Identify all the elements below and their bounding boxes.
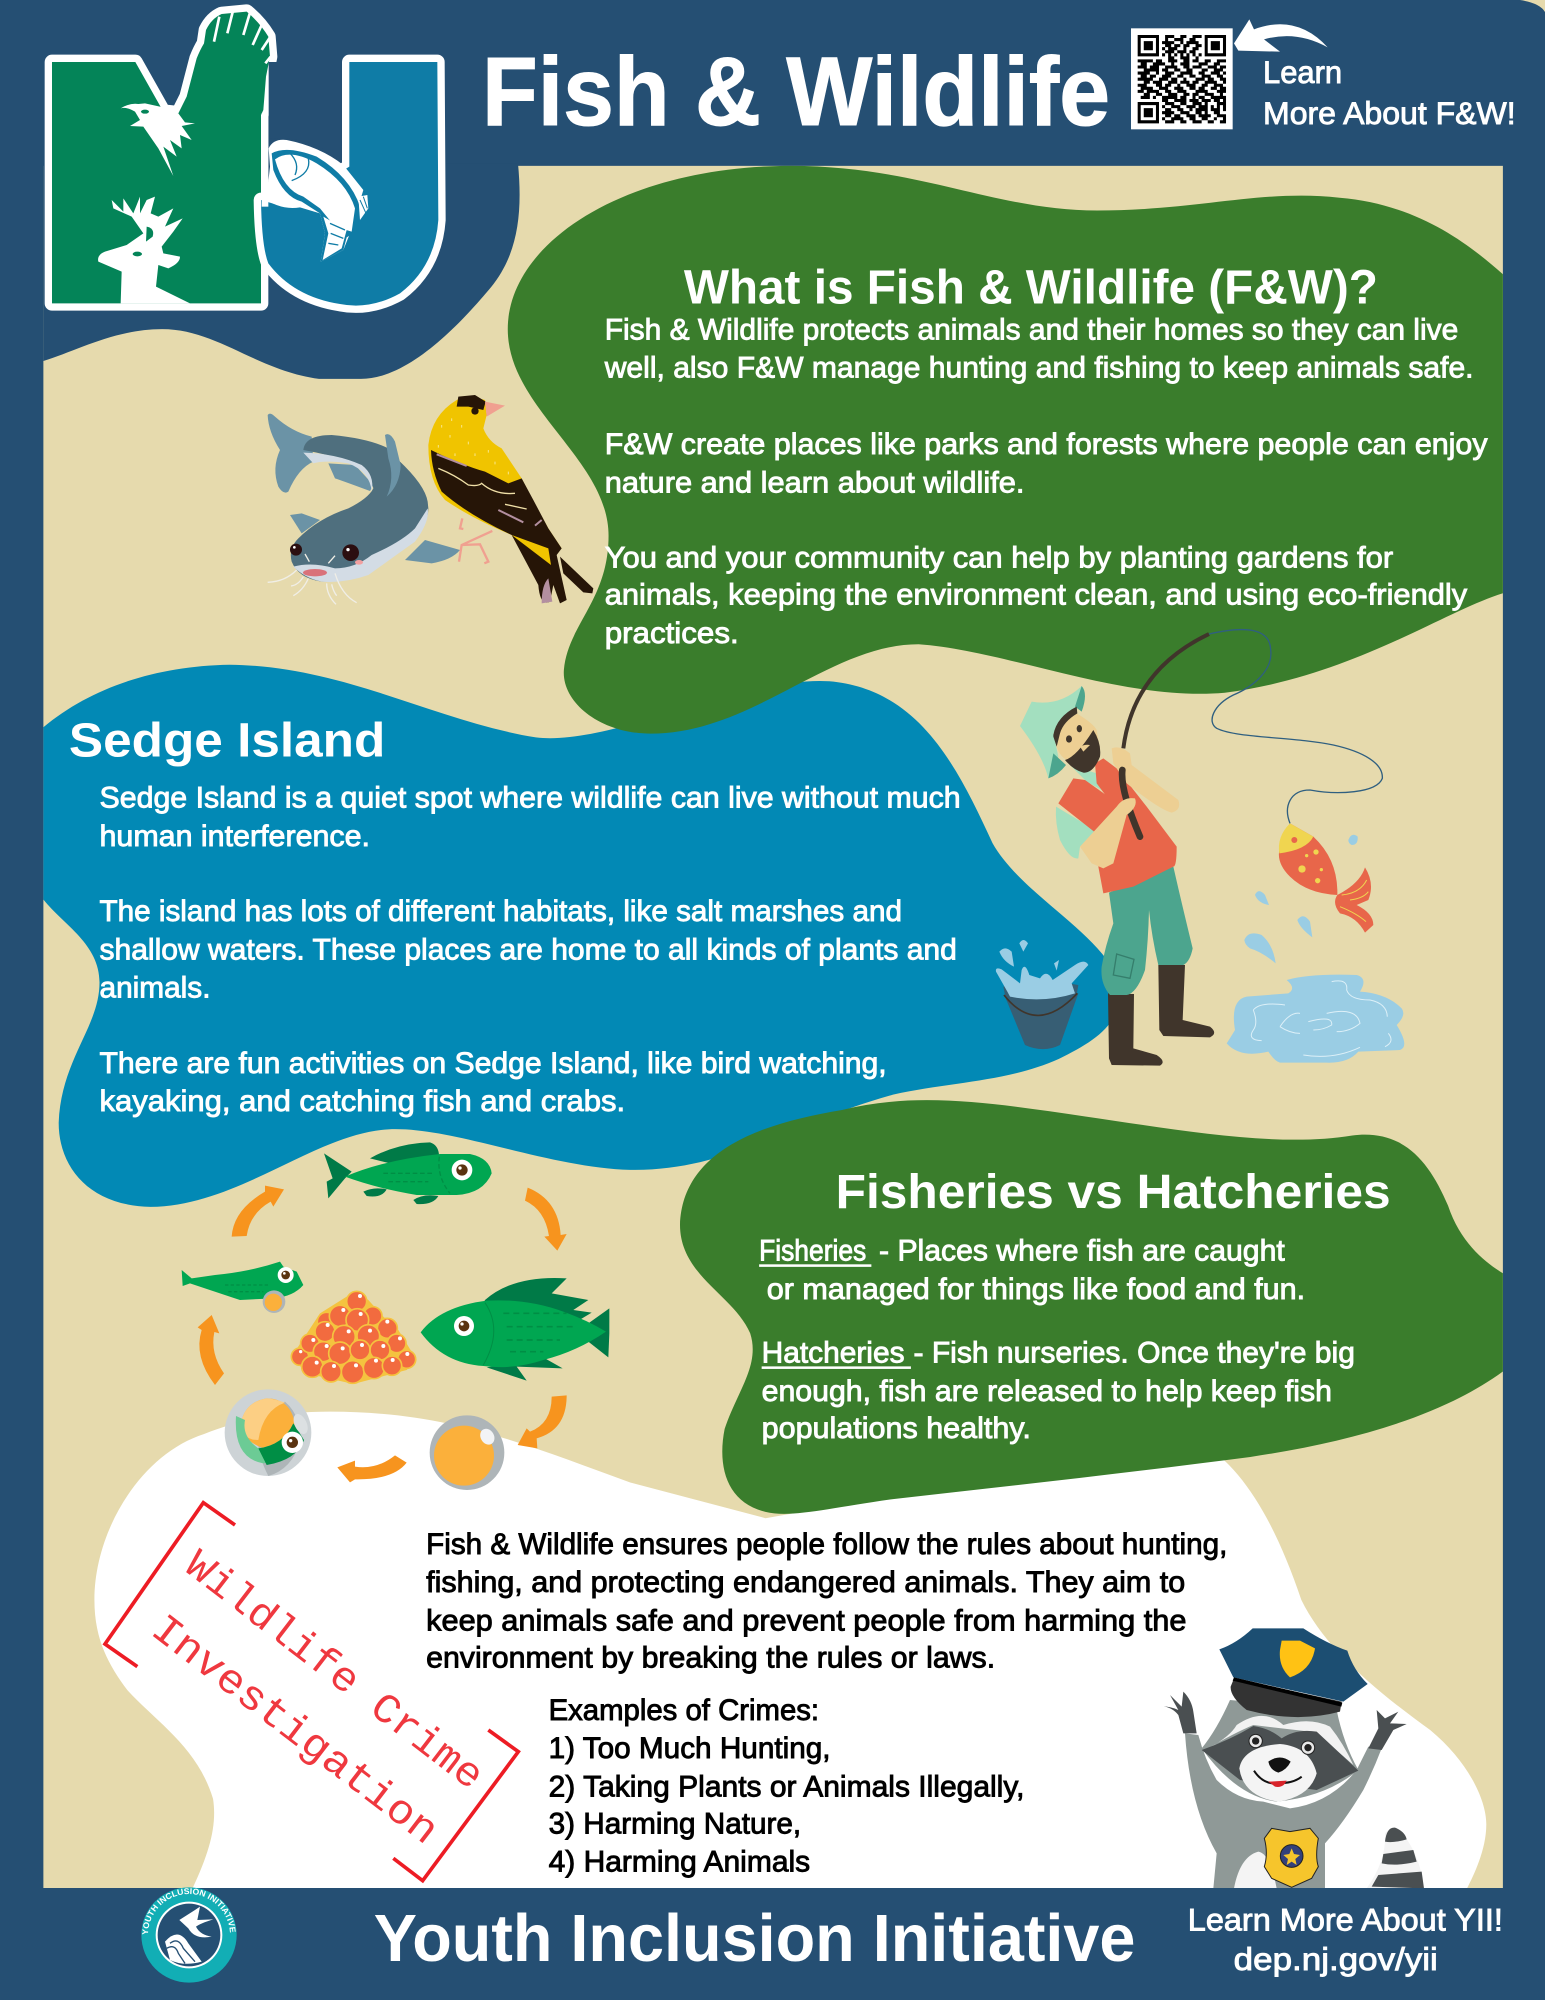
heading: what is F&W: What is Fish & Wildlife (F&W)? bbox=[684, 261, 1378, 315]
text block: enforcement: keep animals safe and prevent people from harming the bbox=[426, 1604, 1186, 1637]
navy gap between letters bbox=[269, 62, 342, 163]
text block: what is F&W: practices. bbox=[605, 617, 739, 650]
QR code block bbox=[1131, 19, 1328, 129]
QR code bbox=[1131, 28, 1233, 129]
text block: fisheries vs hatcheries: Fisheries bbox=[759, 1234, 866, 1267]
text block: what is F&W: You and your community can help by planting gardens for bbox=[605, 542, 1393, 575]
text block: sedge island bbox=[69, 714, 961, 1118]
footer link bbox=[1188, 1901, 1503, 1977]
adult fish right bbox=[421, 1278, 609, 1381]
heading: fisheries vs hatcheries: Fisheries vs Hatcheries bbox=[836, 1165, 1391, 1219]
text block: sedge island: animals. bbox=[100, 972, 211, 1005]
footer link: Learn More About YII! bbox=[1188, 1901, 1503, 1937]
arrow to QR code bbox=[1234, 19, 1328, 52]
text block: sedge island: There are fun activities on Sedge Island, like bird watching, bbox=[100, 1047, 887, 1080]
logo fish body bbox=[272, 150, 360, 262]
footer link: dep.nj.gov/yii bbox=[1234, 1941, 1438, 1977]
text block: fisheries vs hatcheries: or managed for things like food and fun. bbox=[767, 1273, 1305, 1306]
text block: examples of crimes: 3) Harming Nature, bbox=[549, 1807, 801, 1840]
text block: what is F&W bbox=[604, 261, 1488, 650]
single egg bbox=[430, 1415, 504, 1490]
header navy shape bbox=[43, 163, 520, 379]
footer title: Youth Inclusion Initiative bbox=[374, 1902, 1135, 1976]
icon: fisherman scene bbox=[996, 630, 1404, 1066]
panel: fisheries blob bbox=[680, 1100, 1503, 1514]
logo U bbox=[261, 62, 438, 306]
text block: examples of crimes: 2) Taking Plants or Animals Illegally, bbox=[549, 1770, 1024, 1803]
Learn more text: More About F&W! bbox=[1263, 95, 1516, 131]
text block: sedge island: shallow waters. These places are home to all kinds of plants and bbox=[100, 933, 957, 966]
text block: sedge island: human interference. bbox=[100, 820, 370, 853]
footer bar bbox=[0, 1888, 1545, 2000]
puddle bbox=[1227, 975, 1404, 1063]
text block: fisheries vs hatcheries: enough, fish are released to help keep fish bbox=[762, 1375, 1332, 1408]
icon: police raccoon bbox=[1161, 1628, 1424, 1888]
text block: enforcement: Fish & Wildlife ensures people follow the rules about hunting, bbox=[426, 1528, 1227, 1561]
corner accent bbox=[1520, 0, 1545, 12]
panel: sedge island blob bbox=[43, 665, 1119, 1207]
text block: fisheries vs hatcheries: Hatcheries bbox=[762, 1337, 905, 1370]
Learn more text bbox=[1263, 54, 1516, 131]
icon: catfish bbox=[268, 414, 460, 604]
fishing line bbox=[1209, 630, 1382, 823]
panel: what is F&W blob bbox=[508, 166, 1503, 734]
text block: enforcement: environment by breaking the rules or laws. bbox=[426, 1641, 995, 1674]
water drops bbox=[1244, 835, 1358, 963]
text block: what is F&W: animals, keeping the environment clean, and using eco-friendly bbox=[605, 579, 1468, 612]
text block: fisheries vs hatcheries: - Fish nurseries. Once they're big bbox=[913, 1337, 1355, 1370]
police hat bbox=[1219, 1628, 1368, 1702]
icon: fish life cycle bbox=[182, 1142, 609, 1490]
text block: fisheries vs hatcheries: - Places where fish are caught bbox=[879, 1234, 1285, 1267]
adult fish top bbox=[324, 1142, 492, 1204]
stamp: wildlife crime investigation bbox=[105, 1503, 518, 1881]
panel: white crime blob bbox=[94, 1412, 1486, 1888]
hatching egg bbox=[225, 1389, 311, 1476]
text block: sedge island: kayaking, and catching fish and crabs. bbox=[100, 1085, 625, 1118]
heading: sedge island: Sedge Island bbox=[69, 714, 385, 768]
text block: what is F&W: nature and learn about wildlife. bbox=[605, 466, 1024, 499]
raccoon body and arms bbox=[1185, 1733, 1382, 1888]
title: Fish & Wildlife bbox=[482, 37, 1110, 146]
raccoon tail bbox=[1367, 1829, 1423, 1888]
logo fish outline bbox=[262, 140, 363, 262]
police badge bbox=[1264, 1828, 1318, 1887]
logo N with wing bbox=[52, 12, 270, 303]
eagle head bbox=[121, 103, 195, 176]
text block: examples of crimes: 4) Harming Animals bbox=[549, 1846, 810, 1879]
text block: fisheries vs hatcheries: populations healthy. bbox=[762, 1412, 1031, 1445]
deer bbox=[98, 197, 190, 303]
fish eggs pile bbox=[291, 1291, 417, 1384]
icon: goldfinch bbox=[428, 395, 593, 603]
text block: what is F&W: F&W create places like parks and forests where people can enjoy bbox=[605, 428, 1488, 461]
text block: enforcement bbox=[426, 1528, 1227, 1674]
text block: what is F&W: Fish & Wildlife protects animals and their homes so they can live bbox=[605, 313, 1458, 346]
text block: what is F&W: well, also F&W manage hunting and fishing to keep animals safe. bbox=[604, 352, 1474, 385]
stamp: wildlife crime investigation: Investigation bbox=[141, 1606, 447, 1856]
wing feather gaps bbox=[214, 12, 271, 63]
icon: youth inclusion initiative seal: YOUTH INCLUSION INITIATIVE bbox=[142, 1888, 236, 1934]
hooked fish bbox=[1279, 823, 1373, 933]
icon: youth inclusion initiative seal bbox=[141, 1887, 237, 1983]
Learn more text: Learn bbox=[1263, 54, 1342, 90]
stamp: wildlife crime investigation: Wildlife Crime bbox=[175, 1542, 492, 1801]
fisherman bbox=[1020, 686, 1214, 1066]
fishing rod bbox=[1123, 634, 1209, 748]
raccoon head bbox=[1202, 1700, 1358, 1802]
text block: examples of crimes: 1) Too Much Hunting, bbox=[549, 1732, 831, 1765]
juvenile fish bbox=[182, 1262, 303, 1313]
text block: examples of crimes: Examples of Crimes: bbox=[549, 1694, 819, 1727]
text block: enforcement: fishing, and protecting endangered animals. They aim to bbox=[426, 1566, 1185, 1599]
footer text bbox=[374, 1901, 1503, 1977]
cycle arrows bbox=[198, 1186, 567, 1482]
text block: fisheries vs hatcheries bbox=[759, 1165, 1391, 1445]
text block: sedge island: Sedge Island is a quiet spot where wildlife can live without much bbox=[100, 782, 961, 815]
text block: sedge island: The island has lots of different habitats, like salt marshes and bbox=[100, 895, 902, 928]
icon: NJ logo bbox=[52, 12, 438, 306]
bucket bbox=[996, 940, 1088, 1049]
text block: examples of crimes bbox=[549, 1694, 1024, 1879]
